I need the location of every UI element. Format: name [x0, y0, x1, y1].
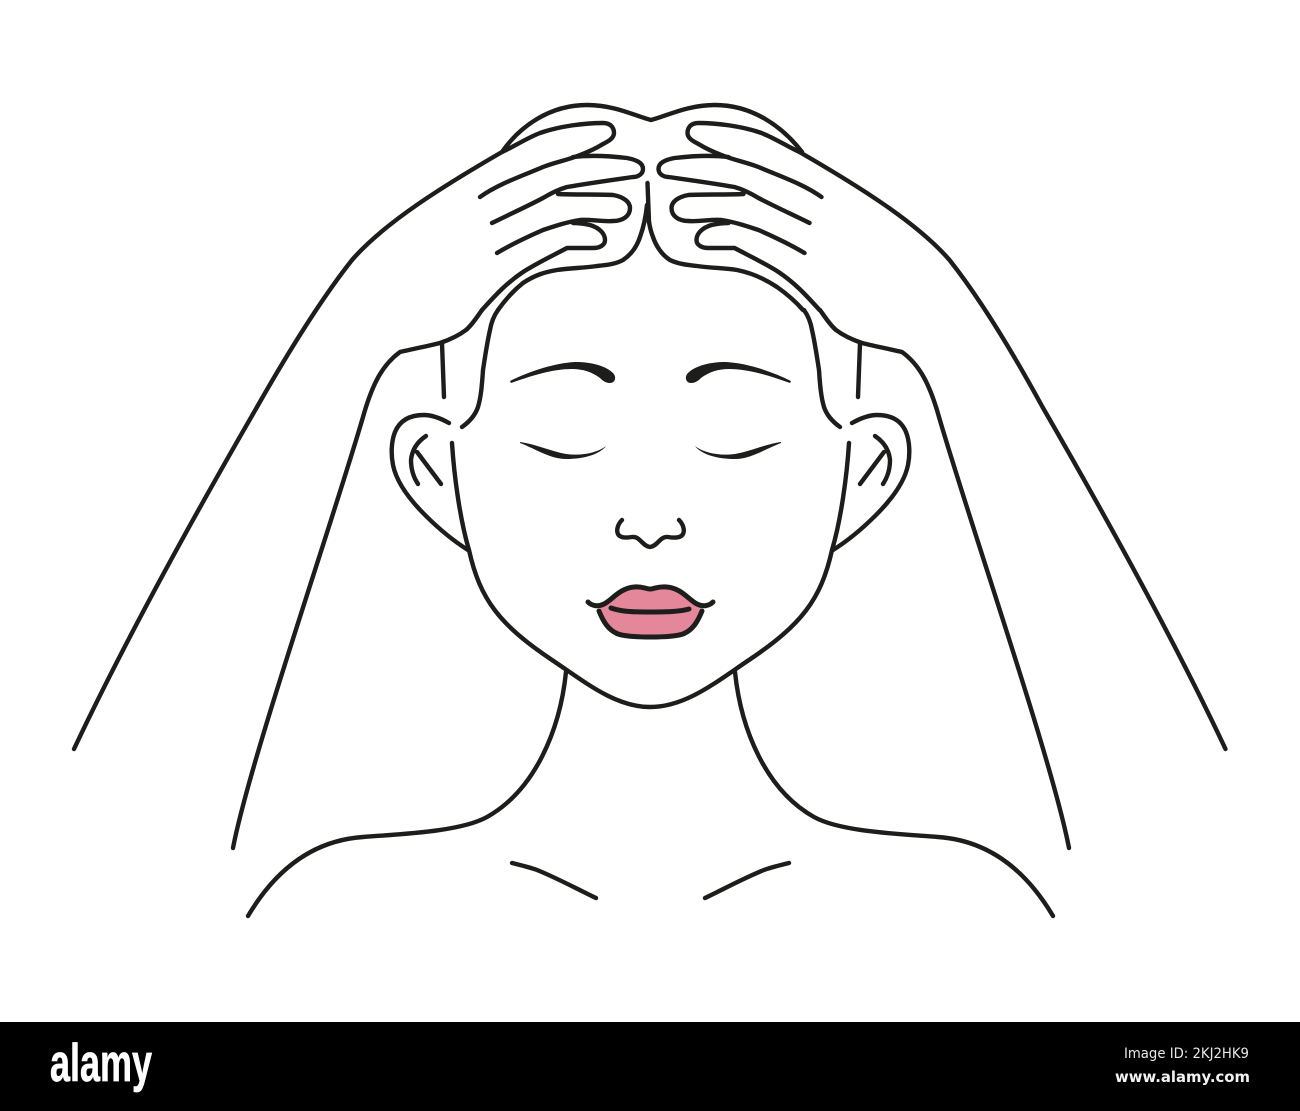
right eyebrow	[686, 362, 791, 383]
right hair line	[820, 310, 1069, 848]
right ear	[833, 415, 909, 550]
right side hair and sideburn	[804, 310, 1069, 848]
right hairline under hand	[649, 222, 803, 310]
left hair line	[233, 310, 482, 848]
right collarbone	[705, 863, 789, 898]
nose	[617, 520, 684, 547]
lips	[588, 587, 713, 637]
website: www.alamy.com	[1115, 1068, 1250, 1086]
right temple line	[804, 310, 840, 427]
right little finger	[696, 223, 820, 310]
left sideburn	[442, 343, 444, 397]
head and hair top outline	[502, 105, 802, 152]
right ring finger	[672, 194, 804, 253]
centre parting line	[648, 183, 649, 222]
left hairline under hand	[498, 205, 647, 310]
left ring finger	[497, 194, 630, 253]
image id: Image ID: 2KJ2HK9	[1124, 1046, 1249, 1062]
left eyebrow	[510, 362, 615, 383]
left collarbone	[512, 863, 596, 898]
lips fill	[600, 587, 701, 637]
left closed eye	[520, 442, 606, 459]
left middle finger	[492, 156, 643, 223]
left temple line	[462, 310, 498, 427]
left little finger	[482, 223, 605, 310]
right middle finger	[658, 156, 810, 223]
upper lip line	[588, 587, 713, 606]
alamy logo: alamy	[50, 1034, 152, 1093]
left ear	[392, 415, 468, 550]
watermark footer bar	[0, 1022, 1300, 1111]
neck and right shoulder	[735, 672, 1053, 916]
left arm outer line	[74, 152, 502, 749]
right arm outer line	[800, 152, 1226, 749]
left index finger	[480, 123, 614, 197]
right index finger	[688, 123, 822, 197]
left side hair and sideburn	[233, 310, 498, 848]
left arm and hand	[74, 123, 647, 749]
lower lip line	[599, 611, 702, 637]
right sideburn	[858, 343, 860, 397]
neck and left shoulder	[248, 672, 566, 916]
mouth line	[611, 608, 689, 612]
face outline and chin	[452, 443, 849, 707]
right closed eye	[695, 442, 781, 459]
right arm and hand	[658, 123, 1226, 749]
